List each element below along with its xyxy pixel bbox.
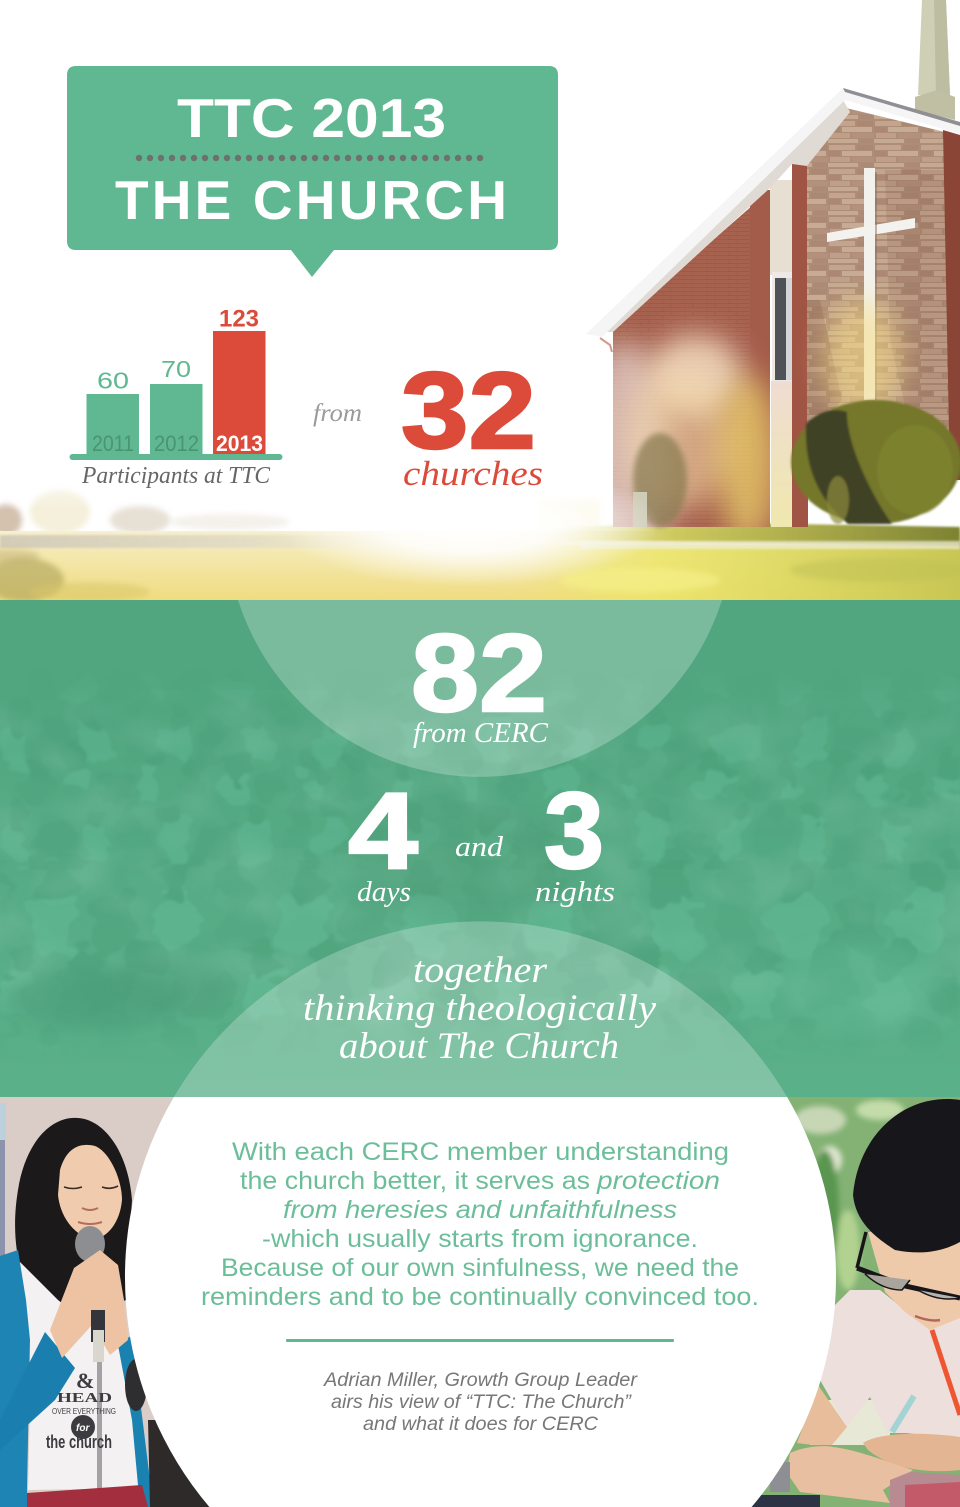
photo: church at sunrise with grass field [0,0,960,602]
title line one: TTC 2013 [177,87,446,149]
skirt [27,1485,148,1507]
orange lanyard [932,1330,960,1415]
title line two: THE CHURCH [115,169,507,231]
grass texture [0,549,960,602]
cream background [810,1400,890,1445]
blue cardigan right [118,1335,150,1507]
stat: 4 days [348,770,418,908]
shirt print: for [76,1423,90,1434]
stat: 32 churches [401,350,543,493]
dark sleeve bottom [750,1495,820,1507]
near rows of people [2,892,941,1005]
pale panel [770,180,792,275]
second microphone [125,1359,147,1411]
tagline: together [413,950,548,991]
tagline [303,950,657,1067]
tagline: thinking theologically [303,988,657,1029]
pen [892,1396,914,1432]
number 4: 4 [348,770,418,892]
writing hand [863,1434,960,1471]
sky wash over horizon [54,493,66,496]
brick column right of panel [792,160,808,527]
quote text [201,1138,759,1311]
brick wall [613,208,750,527]
nights label: nights [535,876,615,908]
glow on stone [824,300,900,420]
green band with faded crowd photo [0,600,960,1097]
microphone stand [97,1362,102,1507]
window [772,272,792,382]
shirt print: the church [46,1432,112,1452]
grass field right tint [520,545,960,600]
attribution text [323,1370,638,1435]
mouth [915,1316,940,1320]
chart baseline [70,454,282,460]
label 2011: 2011 [92,431,134,456]
crowd mottling [0,706,960,1022]
sunlight glow [302,491,652,584]
hands and forearm [50,1250,128,1358]
shirt print: OVER EVERYTHING [52,1407,116,1416]
hair [853,1099,960,1252]
far rows of people [2,729,959,860]
blue sleeve left [0,1332,75,1450]
stone wall [807,108,949,432]
stage equipment [148,1420,220,1507]
quote text: from heresies and unfaithfulness [283,1196,677,1224]
light flare over wall [613,318,770,527]
shirt print [46,1368,116,1452]
chart caption: Participants at TTC [81,463,271,489]
arm [797,1385,847,1445]
bar 2011 [86,394,139,454]
lower translucent circle [174,921,787,1097]
shirt print: & [76,1368,94,1393]
foliage highlights [794,1100,904,1290]
panel: white circle quote area [125,1097,836,1507]
small bush [633,433,687,527]
value 123: 123 [219,306,259,332]
crowd tonal masses [6,851,908,1026]
shadow on stone [885,170,950,450]
wall [0,1097,220,1507]
blue cardigan left [0,1250,30,1507]
attribution text: Adrian Miller, Growth Group Leader [323,1370,638,1391]
hair [15,1118,132,1325]
churches label: churches [403,454,543,493]
label 2012: 2012 [154,431,199,456]
bar 2012 [150,384,202,454]
hedge strip right [520,522,960,546]
dotted divider [139,155,482,161]
days label: days [357,876,411,908]
stat: 3 nights [535,770,615,908]
watch [770,1462,790,1492]
photo: girl singing into microphone [0,1097,220,1507]
boy's shirt [820,1290,960,1440]
utility box [633,492,647,527]
value 70: 70 [161,356,191,382]
brick column left [750,190,770,208]
cup liquid [905,1482,960,1507]
road right [580,541,960,549]
bar chart: participants at TTC [70,306,282,489]
microphone handle [91,1310,105,1342]
band colour [0,600,960,1097]
upper translucent circle [238,600,722,777]
roof soffit [605,100,850,332]
title speech bubble [67,66,558,277]
large bush [791,400,960,524]
quote text: the church better, it serves as [240,1167,590,1195]
eyes [64,1186,118,1188]
white cross [827,168,915,400]
number 3: 3 [544,770,604,892]
face [58,1145,122,1240]
and label: and [455,831,504,863]
quote text: -which usually starts from ignorance. [262,1225,698,1253]
quote text: Because of our own sinfulness, we need the [221,1254,739,1282]
stat: 82 from CERC [411,612,549,749]
from CERC label: from CERC [413,717,549,749]
value 60: 60 [97,368,129,394]
photo: boy writing with glasses [750,1097,960,1507]
attribution text: and what it does for CERC [363,1414,598,1435]
microphone head [75,1226,105,1262]
attribution text: airs his view of “TTC: The Church” [331,1392,633,1413]
resting hand [787,1446,913,1503]
from label: from [313,400,362,427]
right brick column [943,130,960,480]
nose and lips [78,1208,102,1224]
face [868,1232,960,1330]
lower panel [771,381,793,527]
t-shirt [18,1262,142,1490]
window [0,1103,6,1140]
gutter [600,338,612,352]
church walls [613,108,960,527]
distant tree line [0,490,600,536]
bar 2013 [213,331,266,454]
grass field [0,531,960,600]
quote text: With each CERC member understanding [232,1138,729,1166]
quote text: protection [596,1167,720,1195]
attribution divider [286,1339,674,1342]
shirt print: HEAD [57,1391,112,1406]
bubble shape [67,66,558,277]
steeple [915,0,955,120]
roof with white fascia [586,88,960,352]
foliage background [750,1097,960,1507]
tagline: about The Church [339,1026,619,1067]
number 32: 32 [401,350,536,472]
road left [0,534,307,548]
red cup [890,1472,960,1507]
number 82: 82 [411,612,547,735]
label 2013: 2013 [216,431,263,456]
glasses [857,1232,960,1299]
quote text: reminders and to be continually convinced too. [201,1283,759,1311]
crowd photo ghost [0,699,960,1022]
